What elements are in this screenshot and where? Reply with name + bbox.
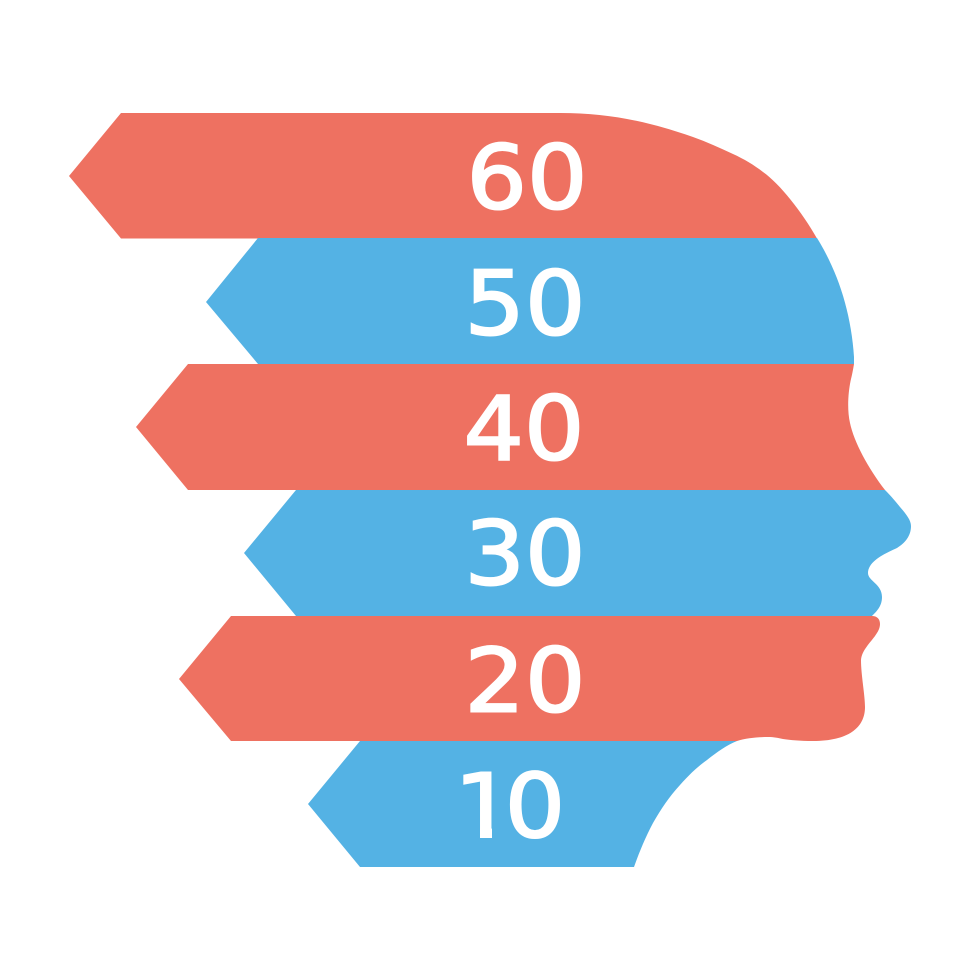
band 10: bottom blue arrow: 10 bbox=[454, 755, 565, 858]
band 10: bottom blue arrow bbox=[308, 741, 737, 867]
band 40: red arrow: 40 bbox=[464, 378, 584, 481]
band 30: blue arrow bbox=[244, 490, 911, 616]
head-shaped arrow infographic bbox=[69, 113, 911, 867]
band 20: red arrow: 20 bbox=[465, 630, 585, 733]
band 50: blue arrow: 50 bbox=[465, 253, 585, 356]
band 30: blue arrow: 30 bbox=[465, 503, 585, 606]
band 60: top red arrow: 60 bbox=[467, 127, 587, 230]
band 60: top red arrow bbox=[69, 113, 817, 238]
band 20: red arrow bbox=[179, 616, 880, 741]
band 40: red arrow bbox=[136, 364, 885, 490]
band 50: blue arrow bbox=[206, 238, 854, 364]
